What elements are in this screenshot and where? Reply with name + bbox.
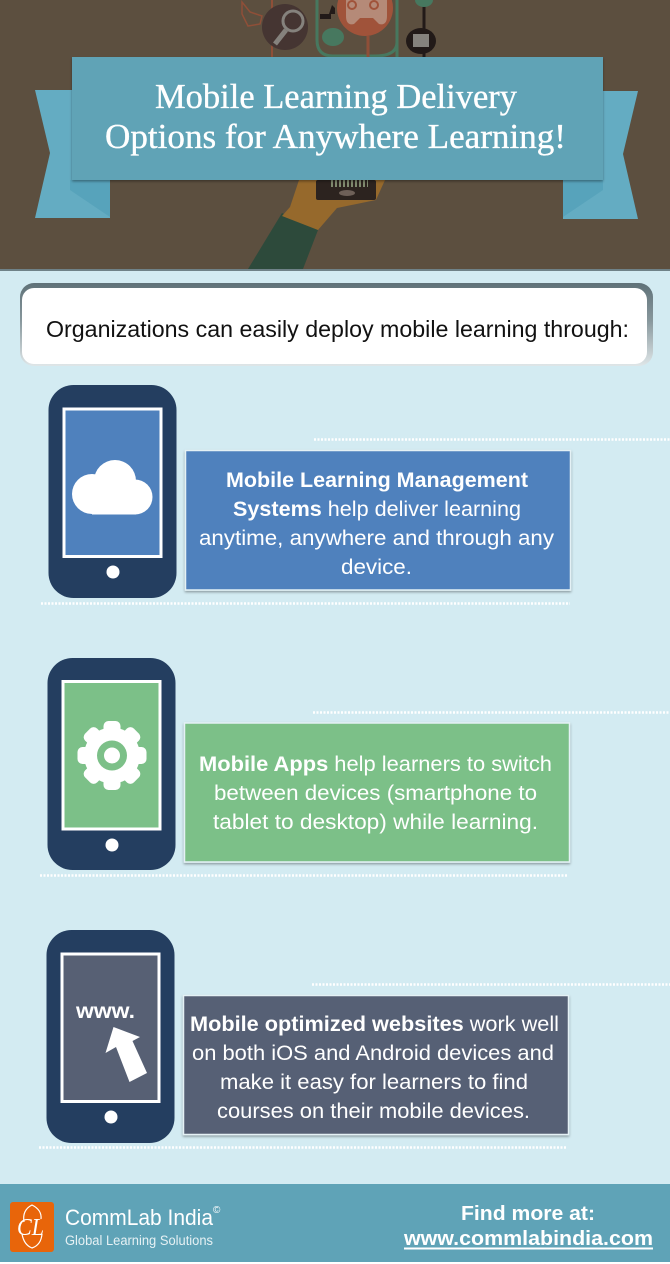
intro text: Organizations can easily deploy mobile learning through: [46,316,629,342]
find more call to action: Find more at: [461,1202,595,1225]
text box: mobile optimized websites [184,996,568,1134]
logo wordmark: © [213,1205,221,1216]
text box: mobile optimized websites: make it easy for learners to find [220,1070,528,1094]
section: mobile optimized websites [39,930,670,1148]
text box: mobile LMS: anytime, anywhere and through any [199,526,554,550]
text box: mobile apps: tablet to desktop) while learning. [213,810,538,834]
logo wordmark: CommLab India [65,1205,214,1230]
phone icon: cloud [48,385,176,598]
section: mobile apps [40,658,670,876]
text box: mobile optimized websites: on both iOS and Android devices and [192,1041,554,1065]
ribbon left tail [35,90,110,218]
logo mark: CL [17,1215,44,1241]
text box: mobile LMS [186,450,570,590]
illustration: hand holding phone with app icons [242,0,436,269]
page background [0,270,670,1184]
title: Options for Anywhere Learning! [105,117,566,156]
text box: mobile LMS: device. [341,555,412,579]
text box: mobile optimized websites: Mobile optimized websites work well [190,1012,559,1036]
icon: gear [78,721,146,790]
www label: www. [75,1000,135,1023]
find more call to action: www.commlabindia.com [403,1227,653,1250]
ribbon banner [35,57,638,219]
title [105,77,566,156]
phone icon: gear [48,658,176,870]
arrow [106,1027,147,1082]
text box: mobile LMS: Systems help deliver learning [233,497,521,521]
footer [0,1184,670,1262]
phone icon: www [46,930,174,1143]
logo wordmark: Global Learning Solutions [65,1233,213,1248]
text box: mobile apps: Mobile Apps help learners to switch [199,752,552,776]
icon: cloud [72,460,152,514]
header banner [0,0,670,271]
text box: mobile optimized websites: courses on their mobile devices. [217,1099,530,1123]
ribbon main panel [72,57,603,180]
find more call to action [403,1202,653,1250]
text box: mobile apps: between devices (smartphone to [214,781,537,805]
ribbon right tail [563,91,638,219]
logo mark [10,1202,54,1252]
logo wordmark [65,1205,221,1248]
section: mobile LMS [41,385,670,604]
intro panel [20,283,653,366]
text box: mobile apps [184,723,570,862]
title: Mobile Learning Delivery [155,77,517,116]
text box: mobile LMS: Mobile Learning Management [226,468,528,492]
